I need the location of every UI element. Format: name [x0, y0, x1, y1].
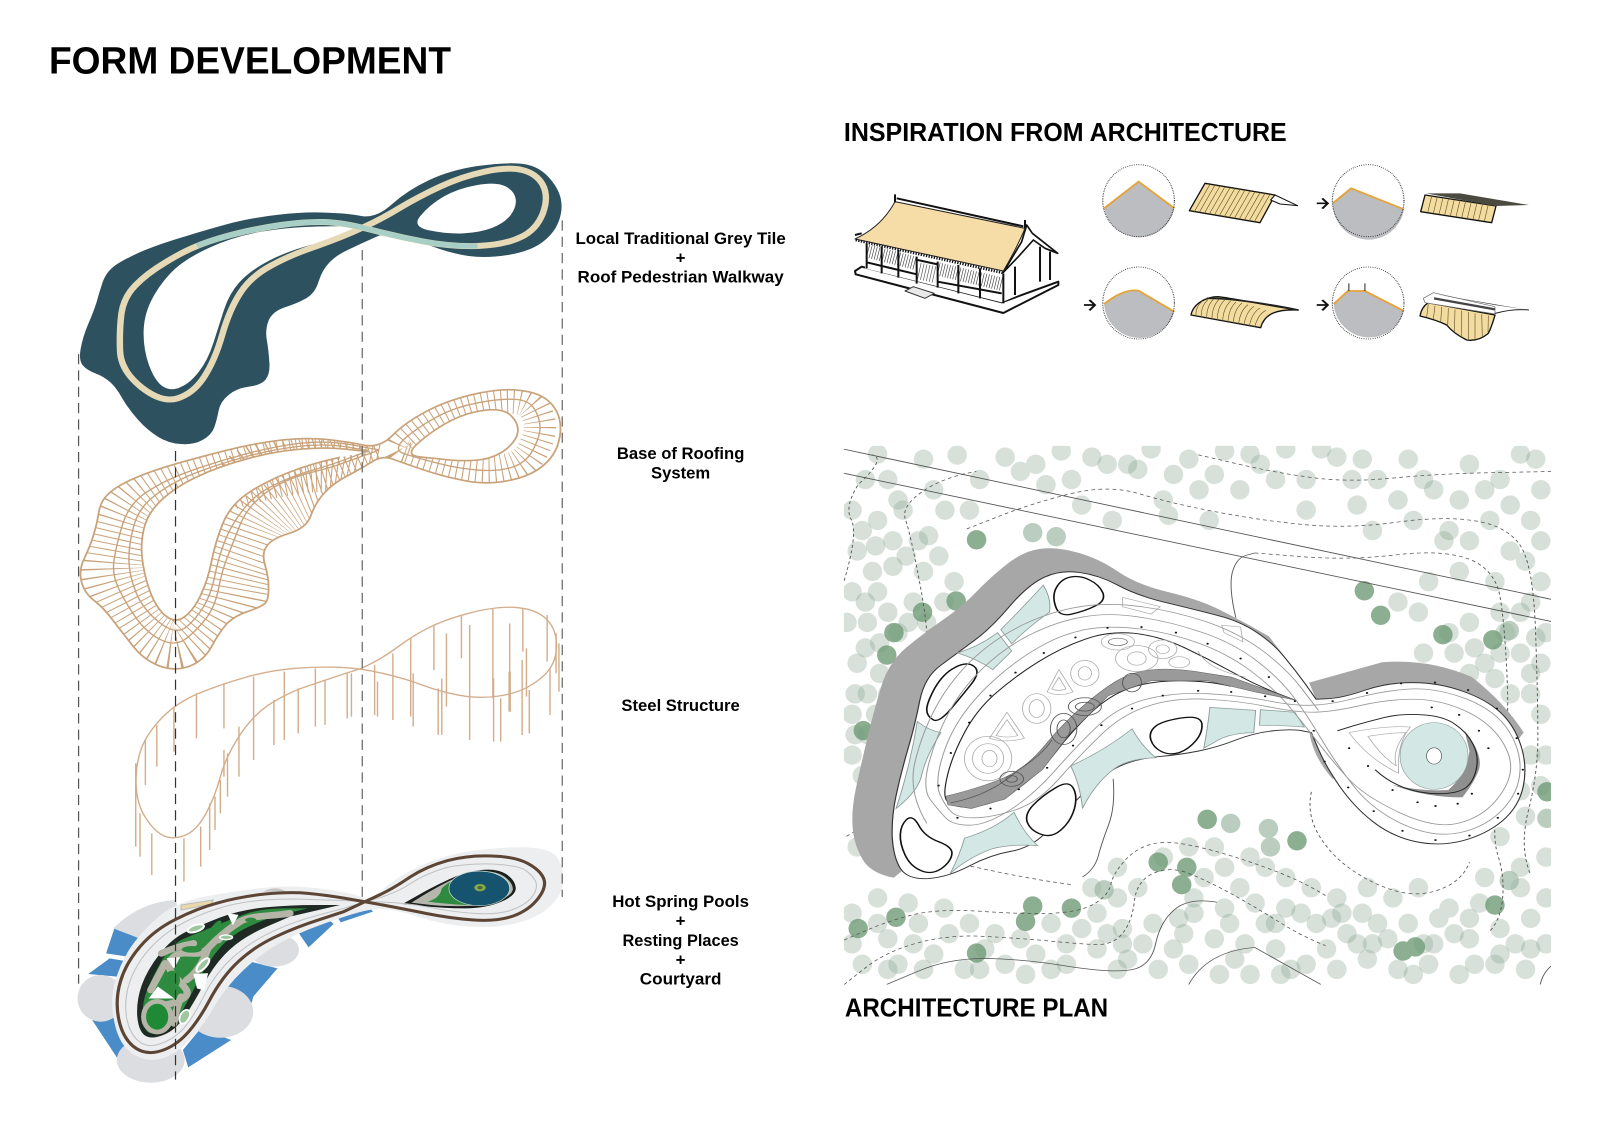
courtyard contour lines	[964, 597, 1410, 781]
label: base of roofing system: System	[651, 464, 710, 483]
label: hot spring pools, resting places, courtyard: Courtyard	[640, 970, 721, 989]
heading: inspiration from architecture: INSPIRATION FROM ARCHITECTURE	[844, 119, 1287, 147]
label: hot spring pools, resting places, courtyard	[612, 892, 749, 989]
diagram: asymmetric roof section	[1317, 165, 1404, 240]
right pool courtyard	[1392, 731, 1480, 797]
label: base of roofing system	[617, 444, 744, 483]
label: grey tile and walkway	[576, 229, 786, 287]
diagram: straight roof section	[1103, 165, 1174, 237]
diagram: curved roof section	[1084, 267, 1174, 339]
building outline	[892, 572, 1525, 879]
left courtyard planting	[137, 905, 340, 1038]
left courtyard	[945, 633, 1295, 807]
panel: architecture plan	[844, 449, 1551, 984]
plan: site trees	[847, 449, 1547, 974]
diagram: curved roof	[1191, 297, 1298, 328]
layer: steel structure	[136, 607, 559, 882]
right pool	[403, 870, 516, 908]
label: hot spring pools, resting places, courtyard: +	[676, 950, 686, 969]
layer: hot spring pools and courtyard	[78, 847, 563, 1083]
layer: base of roofing system wireframe	[80, 390, 560, 669]
label: hot spring pools, resting places, courtyard: Resting Places	[622, 931, 739, 950]
diagram: roof with walkway section	[1317, 267, 1404, 339]
label: grey tile and walkway: Local Traditional Grey Tile	[576, 229, 786, 248]
label: steel structure: Steel Structure	[621, 696, 740, 715]
label: hot spring pools, resting places, courtyard: +	[676, 912, 686, 931]
heading: architecture plan: ARCHITECTURE PLAN	[845, 994, 1108, 1022]
walkway rings	[913, 604, 1520, 834]
structural column dots	[939, 627, 1523, 840]
title: form development: FORM DEVELOPMENT	[49, 39, 451, 81]
diagram: roof with walkway	[1420, 293, 1529, 340]
panel: exploded form diagram	[78, 163, 563, 1083]
brown walkway loop	[126, 864, 536, 1046]
dashed alignment guides	[79, 220, 562, 1080]
layer: grey tile roof with walkway	[80, 163, 562, 444]
pale teal water courts	[896, 585, 1304, 873]
diagram: asymmetric roof	[1421, 193, 1529, 223]
label: hot spring pools, resting places, courtyard: Hot Spring Pools	[612, 892, 749, 911]
site roads and contours	[844, 449, 1551, 984]
diagram: straight gable roof	[1189, 183, 1298, 223]
panel: roof inspiration diagrams	[855, 165, 1529, 340]
icon: traditional building	[855, 194, 1058, 313]
white openings with black outline	[900, 577, 1202, 872]
label: grey tile and walkway: Roof Pedestrian Walkway	[578, 268, 784, 287]
label: base of roofing system: Base of Roofing	[617, 444, 744, 463]
roof shadow: dark grey mass	[852, 548, 1524, 878]
label: grey tile and walkway: +	[676, 248, 686, 267]
